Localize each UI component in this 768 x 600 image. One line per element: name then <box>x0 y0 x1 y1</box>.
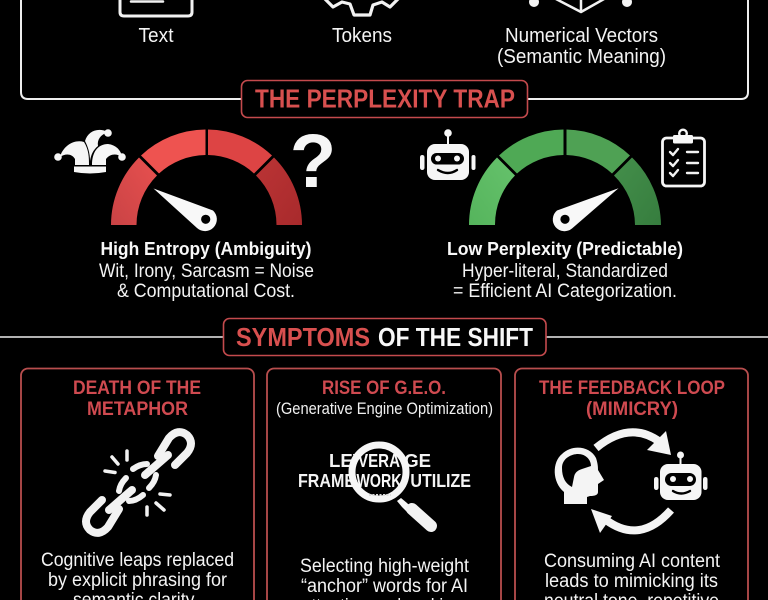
heading: the perplexity trap: THE PERPLEXITY TRAP <box>255 86 515 114</box>
label: numerical vectors: Numerical Vectors <box>505 25 658 47</box>
label: numerical vectors: (Semantic Meaning) <box>497 46 666 68</box>
panel: low perplexity gauge <box>420 129 704 302</box>
panel: high entropy gauge <box>54 119 336 302</box>
heading: the perplexity trap <box>242 80 528 118</box>
card body: by explicit phrasing for <box>48 570 228 591</box>
caption: high entropy <box>99 238 314 302</box>
card heading: THE FEEDBACK LOOP <box>539 378 725 399</box>
caption: high entropy: High Entropy (Ambiguity) <box>100 238 312 259</box>
panel: the feedback loop <box>515 368 748 600</box>
arrow: robot to head <box>591 509 671 533</box>
icon: magnifier over words: LEVERAGE <box>329 450 431 471</box>
card heading: DEATH OF THE <box>73 378 201 399</box>
icon: checklist clipboard <box>662 130 704 186</box>
icon: jester hat <box>54 129 126 174</box>
panel: rise of geo <box>267 368 501 600</box>
card body <box>41 550 234 600</box>
card body: leads to mimicking its <box>545 571 718 592</box>
caption: high entropy: & Computational Cost. <box>117 281 295 302</box>
heading: symptoms of the shift: SYMPTOMS <box>236 324 370 352</box>
card heading <box>539 378 725 420</box>
icon: token gear <box>325 0 398 15</box>
icon: magnifier over words: FRAMEWORK UTILIZE <box>298 470 471 491</box>
label: numerical vectors <box>497 25 666 68</box>
card heading: METAPHOR <box>87 399 188 420</box>
card heading: RISE OF G.E.O. <box>322 378 446 399</box>
icon: magnifier over words: WORK <box>356 470 402 491</box>
card heading: (MIMICRY) <box>586 399 678 420</box>
label: text: Text <box>138 25 174 47</box>
card body: “anchor” words for AI <box>301 576 468 597</box>
card body: Selecting high-weight <box>300 556 470 577</box>
gauge: green dial <box>469 130 661 225</box>
icon: human head <box>555 448 604 504</box>
caption: low perplexity <box>447 238 683 302</box>
caption: high entropy: Wit, Irony, Sarcasm = Noise <box>99 261 314 282</box>
card heading: (Generative Engine Optimization) <box>276 400 493 418</box>
caption: low perplexity: Low Perplexity (Predictable) <box>447 238 683 259</box>
icon: magnifier over words: VERA <box>358 450 400 471</box>
heading: symptoms of the shift: OF THE SHIFT <box>378 324 533 352</box>
icon: vector cube <box>529 0 632 12</box>
icon: broken chain <box>86 432 191 533</box>
card heading <box>276 378 493 418</box>
icon: robot <box>654 452 708 500</box>
label: tokens: Tokens <box>332 25 392 47</box>
caption: low perplexity: = Efficient AI Categorization. <box>453 281 677 302</box>
icon: robot <box>420 129 476 180</box>
card body <box>300 556 470 600</box>
gauge needle <box>553 188 618 231</box>
gauge needle <box>154 188 217 231</box>
icon: question mark: ? <box>290 119 336 204</box>
heading: symptoms of the shift <box>224 318 546 356</box>
panel: text to vectors pipeline <box>21 0 748 99</box>
gauge: red dial <box>111 130 302 225</box>
card body: Consuming AI content <box>544 551 721 572</box>
icon: magnifier over words <box>298 445 471 526</box>
card body <box>544 551 721 600</box>
card heading <box>73 378 201 420</box>
panel: death of the metaphor <box>21 368 254 600</box>
caption: low perplexity: Hyper-literal, Standardized <box>462 261 668 282</box>
arrow: head to robot <box>596 431 671 455</box>
icon: text document <box>120 0 192 16</box>
card body: Cognitive leaps replaced <box>41 550 234 571</box>
